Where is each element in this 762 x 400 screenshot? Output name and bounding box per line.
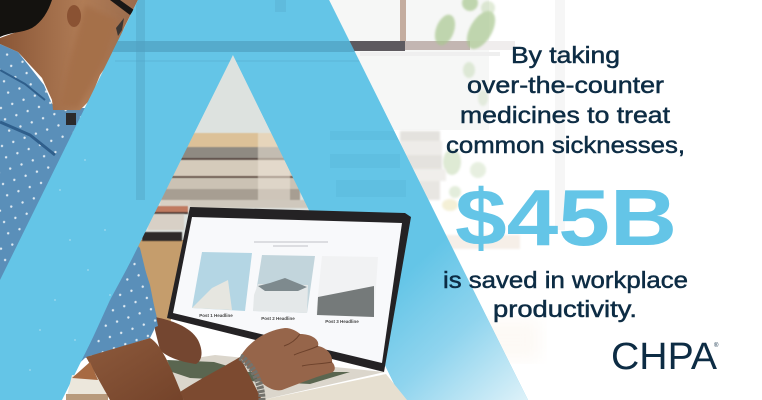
screen caption — [254, 241, 328, 247]
screen card 2 — [253, 255, 315, 321]
screen card 3: Post 3 Headline — [325, 319, 359, 324]
inner triangle wall — [120, 55, 340, 270]
screen card 2: Post 2 Headline — [261, 316, 295, 321]
person: shirt — [0, 44, 158, 400]
CHPA logo: ® — [714, 342, 719, 349]
plant leaves — [431, 0, 501, 211]
laptop screen — [173, 217, 402, 363]
reflections seen through the A — [29, 0, 406, 371]
forearm — [180, 357, 262, 400]
laptop — [167, 207, 411, 400]
person: head — [0, 0, 138, 125]
blue A fading corner — [233, 0, 528, 400]
desk — [100, 240, 185, 325]
laptop lid — [167, 207, 411, 372]
finger shading — [284, 334, 332, 366]
CHPA logo: CHPA — [611, 336, 718, 378]
person: arm and right hand — [72, 328, 335, 400]
screen card 1: Post 1 Headline — [199, 313, 233, 318]
right hand — [240, 328, 335, 390]
blue A shape — [0, 0, 528, 400]
laptop base — [170, 355, 385, 400]
faded book stack, right — [400, 131, 446, 200]
left hand — [155, 317, 202, 364]
hair — [0, 0, 52, 37]
text block: intro: common sicknesses, — [446, 132, 685, 158]
text block: conclusion: is saved in workplace — [443, 267, 688, 293]
bracelet — [240, 357, 262, 400]
keyboard — [167, 360, 350, 384]
screen card 1 — [192, 252, 252, 318]
text block: intro — [446, 42, 685, 158]
big number: $45B — [455, 173, 677, 262]
glasses — [110, 0, 134, 15]
text block: conclusion — [443, 267, 688, 322]
text block: intro: By taking — [511, 42, 620, 68]
text block: intro: over-the-counter — [467, 72, 664, 98]
screen card 3 — [316, 256, 378, 324]
sleeve — [85, 248, 158, 355]
text block: conclusion: productivity. — [493, 296, 637, 322]
books under the arm — [66, 375, 108, 400]
text block: intro: medicines to treat — [460, 102, 671, 128]
book stack, centre — [142, 133, 308, 241]
upper arm — [86, 338, 184, 400]
